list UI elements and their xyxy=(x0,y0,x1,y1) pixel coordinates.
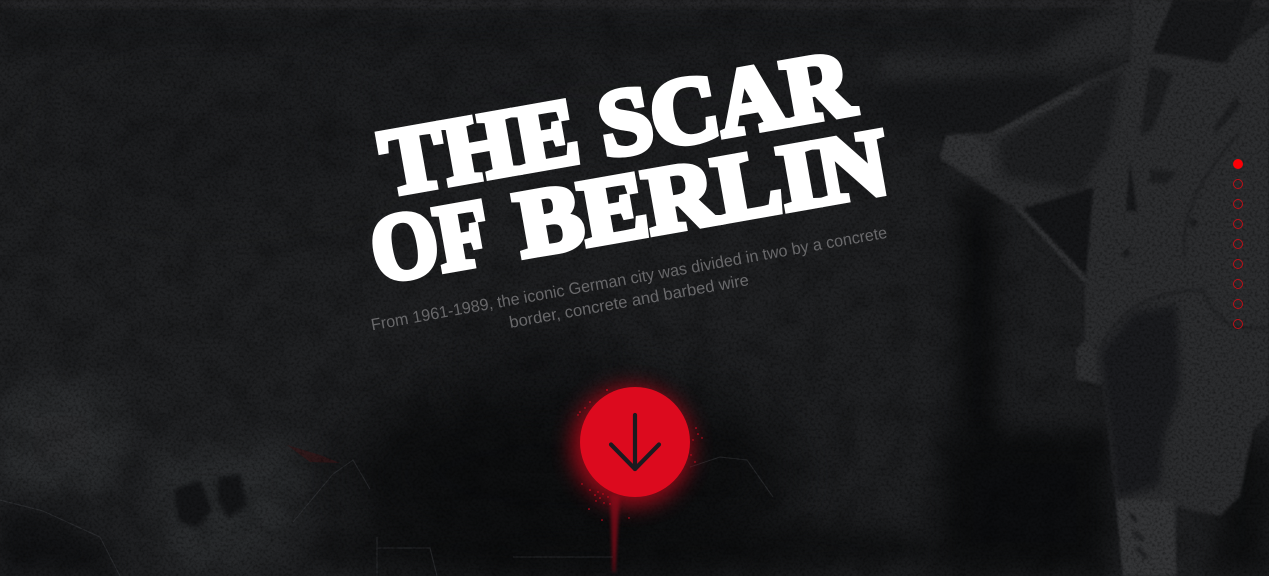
dark holes xyxy=(174,474,247,528)
title: BERLIN xyxy=(508,110,896,277)
section navigation dots xyxy=(1234,160,1242,328)
title xyxy=(349,27,896,303)
subtitle: From 1961-1989, the iconic German city was divided in two by a concrete xyxy=(370,224,889,334)
dark vertical stain xyxy=(960,190,994,440)
active dot xyxy=(1234,160,1242,168)
spray glow xyxy=(572,386,692,506)
scroll-down button: red spray-paint circle with arrow xyxy=(572,386,703,572)
title: OF xyxy=(363,180,497,303)
faint cracks xyxy=(0,457,773,576)
title: THE SCAR xyxy=(373,31,861,216)
background: ghosted soldier figure xyxy=(880,0,1269,576)
paint spatter xyxy=(577,389,703,521)
red stain on the wall xyxy=(287,445,340,463)
red disc xyxy=(580,387,690,497)
inactive dots xyxy=(1234,180,1242,328)
paint drip xyxy=(610,495,620,572)
subtitle: border, concrete and barbed wire xyxy=(508,271,750,332)
dark lower wall xyxy=(0,505,125,576)
down arrow icon xyxy=(611,415,659,469)
lighter patches lower left xyxy=(0,380,130,497)
